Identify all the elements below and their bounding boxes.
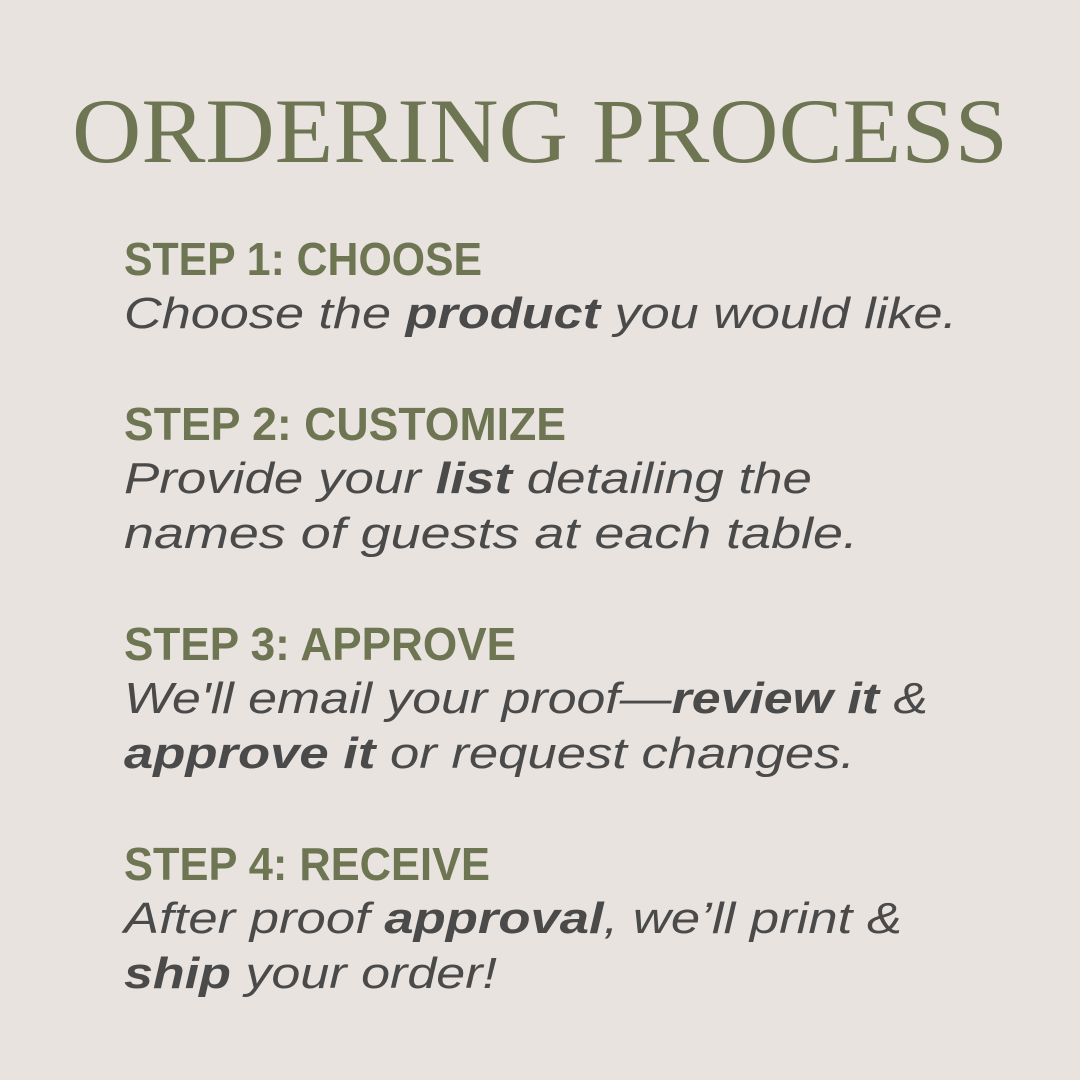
step 1 heading: STEP 1: CHOOSE — [124, 233, 482, 285]
step 4 body — [120, 894, 902, 998]
step 3 body — [124, 674, 928, 778]
step 2 body: names of guests at each table. — [124, 509, 858, 558]
step 2 — [124, 398, 858, 558]
step 2 body: Provide your list detailing the — [124, 454, 812, 503]
title: ORDERING PROCESS — [72, 80, 1008, 182]
step 2 body — [124, 454, 858, 558]
step 1 body: Choose the product you would like. — [124, 289, 957, 338]
step 3 body: We'll email your proof— review it & — [124, 674, 928, 723]
step 4 body: After proof approval , we’ll print & — [120, 894, 902, 943]
step 1 — [124, 233, 957, 338]
step 4 body: ship your order! — [124, 949, 497, 998]
step 3 body: approve it or request changes. — [124, 729, 855, 778]
step 4 — [120, 838, 902, 998]
step 3 heading: STEP 3: APPROVE — [124, 618, 516, 670]
step 2 heading: STEP 2: CUSTOMIZE — [124, 398, 566, 450]
step 4 heading: STEP 4: RECEIVE — [124, 838, 490, 890]
step 3 — [124, 618, 928, 778]
